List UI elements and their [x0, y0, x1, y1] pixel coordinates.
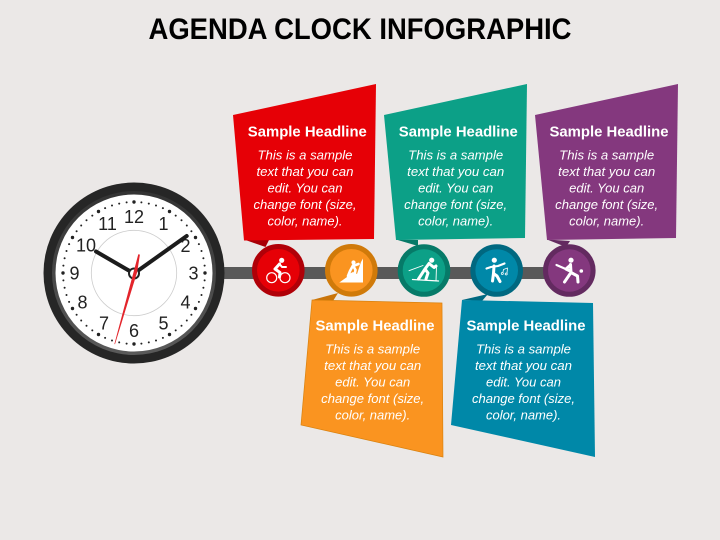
icon: cyclist — [254, 246, 302, 294]
clock numerals: 8 — [77, 292, 88, 312]
orange body text — [321, 342, 424, 423]
clock numerals: 11 — [98, 214, 117, 234]
clock numerals: 10 — [76, 236, 96, 256]
teal body text: This is a sample — [408, 148, 503, 162]
purple headline: Sample Headline — [550, 124, 668, 141]
clock numerals: 5 — [158, 314, 169, 334]
purple body text — [555, 148, 658, 229]
clock bezel — [44, 182, 224, 364]
red callout shape — [233, 84, 376, 247]
panel: blue — [451, 294, 595, 457]
panel: teal — [384, 84, 527, 246]
orange body text: color, name). — [335, 409, 410, 423]
orange body text: change font (size, — [321, 392, 424, 406]
panel: purple — [535, 84, 678, 247]
teal body text: color, name). — [418, 215, 493, 229]
red body text — [254, 148, 356, 229]
blue body text: This is a sample — [476, 342, 571, 356]
icon: batter — [546, 247, 593, 294]
clock numerals: 9 — [69, 264, 80, 284]
red headline: Sample Headline — [248, 124, 367, 141]
clock numerals — [69, 207, 199, 341]
clock numerals: 12 — [124, 207, 144, 227]
clock — [44, 182, 224, 364]
clock numerals: 1 — [158, 214, 169, 234]
blue body text: text that you can — [475, 359, 572, 373]
panel: red — [233, 84, 376, 247]
red body text: edit. You can — [268, 182, 343, 196]
icon: climber — [328, 246, 375, 294]
clock hands — [96, 236, 187, 344]
teal body text: text that you can — [407, 165, 504, 179]
icon: skier — [400, 247, 448, 294]
blue body text: change font (size, — [472, 392, 575, 406]
blue callout shape — [451, 294, 595, 457]
orange callout shape — [301, 293, 443, 457]
red body text: color, name). — [268, 215, 342, 229]
purple body text: This is a sample — [559, 148, 654, 162]
clock numerals: 7 — [99, 314, 109, 334]
clock numerals: 2 — [180, 236, 191, 256]
icon: dancer — [473, 247, 520, 294]
purple body text: color, name). — [569, 215, 644, 229]
clock numerals: 6 — [129, 321, 139, 341]
orange body text: text that you can — [324, 359, 421, 373]
clock face — [56, 194, 212, 352]
title: AGENDA CLOCK INFOGRAPHIC — [148, 13, 572, 46]
clock numerals: 3 — [188, 264, 199, 284]
minute dots — [61, 200, 207, 346]
orange body text: edit. You can — [335, 376, 410, 390]
purple body text: text that you can — [558, 165, 655, 179]
blue headline: Sample Headline — [466, 318, 586, 335]
teal body text: edit. You can — [418, 182, 493, 196]
panel: orange — [301, 293, 443, 457]
teal headline: Sample Headline — [399, 124, 518, 141]
red body text: This is a sample — [258, 148, 353, 162]
red body text: text that you can — [256, 165, 354, 179]
purple callout shape — [535, 84, 678, 247]
teal body text — [404, 148, 507, 229]
orange body text: This is a sample — [325, 342, 420, 356]
purple body text: change font (size, — [555, 198, 658, 212]
blue body text — [472, 342, 575, 423]
clock numerals: 4 — [180, 292, 191, 312]
red body text: change font (size, — [254, 198, 356, 212]
inner ring — [91, 230, 177, 316]
blue body text: edit. You can — [486, 376, 561, 390]
purple body text: edit. You can — [569, 182, 644, 196]
timeline bar — [222, 267, 562, 279]
orange headline: Sample Headline — [316, 318, 434, 335]
blue body text: color, name). — [486, 409, 561, 423]
teal body text: change font (size, — [404, 198, 507, 212]
teal callout shape — [384, 84, 527, 246]
